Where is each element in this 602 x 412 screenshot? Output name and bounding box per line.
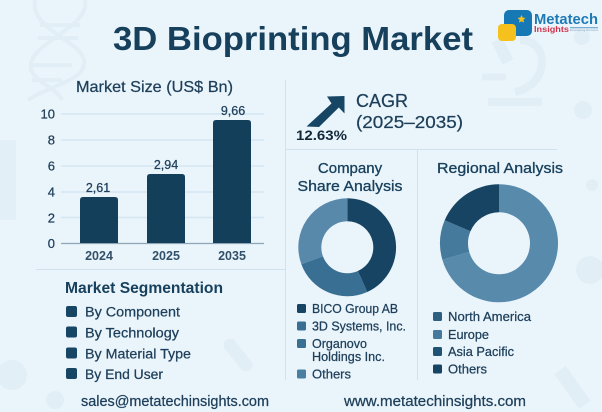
bar chart: market size: 0 [48,236,55,251]
legend: regional share: Others [448,362,487,376]
panel: regional analysis [433,160,563,376]
icon: growth arrow [306,96,344,127]
chart heading: Market Size (US$ Bn) [76,79,233,96]
bar chart: market size: 2025 [152,249,180,263]
bar chart: market size: 2,61 [86,181,110,195]
market segmentation list: By Component [85,304,180,320]
bar chart: market size: 8 [48,132,55,148]
bar chart: market size: 10 [41,106,55,122]
legend: regional share: North America [448,310,531,324]
bar chart: market size: 2024 [85,249,113,263]
bar chart: market size: 6 [48,158,55,174]
legend: regional share: Europe [448,328,489,342]
legend: regional share [433,310,531,376]
CAGR callout: CAGR [356,90,408,111]
legend: regional share: Asia Pacific [448,345,514,359]
footer: contact email: sales@metatechinsights.com [81,394,269,410]
market segmentation list: By Technology [85,326,179,340]
bar chart: market size: 2035 [218,249,246,263]
logo: Metatech Insights: Insights [534,24,569,34]
panel: company share analysis [297,160,406,382]
legend: company share: 3D Systems, Inc. [312,320,406,334]
logo: Metatech Insights: Empowering Decisions [570,29,599,32]
legend: company share [297,302,406,382]
legend: company share: Holdings Inc. [312,350,385,364]
bar chart: market size: 9,66 [221,104,245,118]
donut chart: regional share [440,184,558,302]
CAGR callout: (2025–2035) [356,112,463,132]
panel: company share analysis: Company [318,160,383,177]
CAGR callout: 12.63% [296,127,348,143]
legend: company share: Others [312,368,351,382]
title: 3D Bioprinting Market [113,20,473,57]
legend: company share: BICO Group AB [312,302,398,316]
market segmentation list: Market Segmentation [65,280,223,297]
footer: website: www.metatechinsights.com [343,394,526,410]
bar chart: market size: 2 [48,210,55,226]
panel: company share analysis: Share Analysis [298,178,402,195]
logo: Metatech Insights [498,10,599,41]
bar chart: market size [41,79,264,263]
dividers [36,80,557,380]
market segmentation list: By Material Type [85,346,191,362]
logo: Metatech Insights: Metatech [534,12,598,28]
legend: company share: Organovo [312,337,367,351]
market segmentation list [65,280,223,382]
market segmentation list: By End User [85,367,164,382]
bar chart: market size: 4 [48,184,55,200]
donut chart: company share [298,198,396,296]
CAGR callout [296,90,463,143]
panel: regional analysis: Regional Analysis [437,160,563,177]
bar chart: market size: 2,94 [154,158,178,172]
